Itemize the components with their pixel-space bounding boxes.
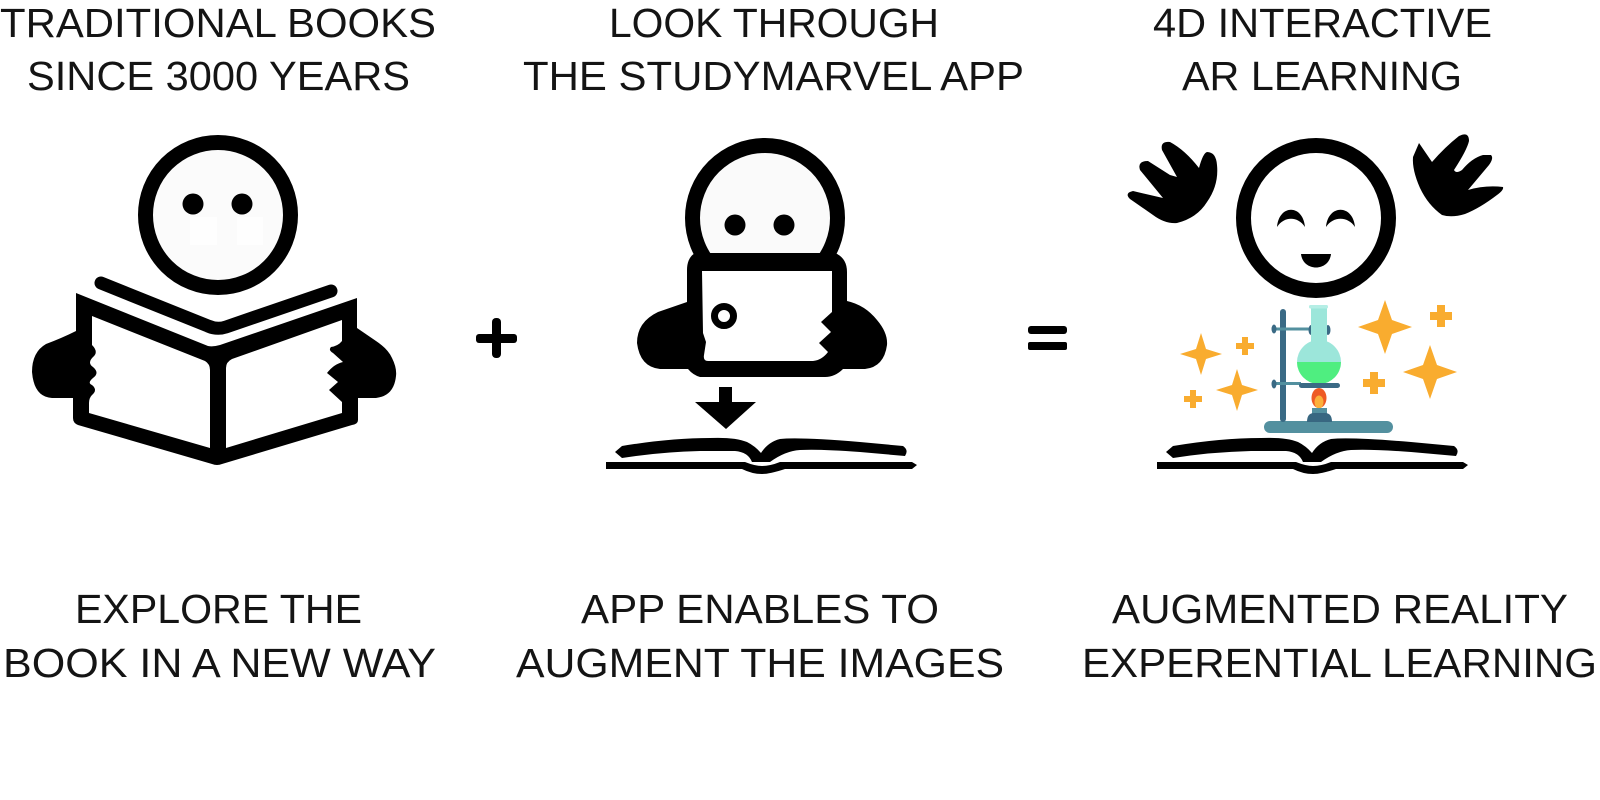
- icon: open book under flask: [1157, 438, 1468, 474]
- icon: sparkles: [1180, 300, 1457, 411]
- caption: explore the book: [3, 586, 436, 686]
- caption: augmented reality: [1082, 586, 1597, 686]
- icon: chemistry flask on burner: [1264, 305, 1393, 433]
- heading: look through the app: [523, 0, 1024, 99]
- icon: person reading a book: [32, 142, 396, 465]
- caption: app enables: [516, 586, 1004, 686]
- heading: traditional books: [0, 0, 436, 99]
- heading: traditional books: SINCE 3000 YEARS: [27, 53, 410, 99]
- caption: explore the book: EXPLORE THE: [75, 586, 362, 632]
- heading: traditional books: TRADITIONAL BOOKS: [0, 0, 436, 46]
- caption: augmented reality: EXPERENTIAL LEARNING: [1082, 640, 1597, 686]
- heading: look through the app: THE STUDYMARVEL APP: [523, 53, 1024, 99]
- icon: happy person with raised hands: [1128, 134, 1503, 290]
- caption: explore the book: BOOK IN A NEW WAY: [3, 640, 436, 686]
- caption: app enables: APP ENABLES TO: [581, 586, 939, 632]
- icon: open book: [606, 438, 917, 474]
- heading: 4D interactive AR learning: [1153, 0, 1492, 99]
- icon: equals sign: [1028, 326, 1067, 350]
- icon: plus sign: [476, 318, 517, 358]
- heading: look through the app: LOOK THROUGH: [609, 0, 939, 46]
- caption: augmented reality: AUGMENTED REALITY: [1112, 586, 1568, 632]
- heading: 4D interactive AR learning: 4D INTERACTIVE: [1153, 0, 1492, 46]
- caption: app enables: AUGMENT THE IMAGES: [516, 640, 1004, 686]
- heading: 4D interactive AR learning: AR LEARNING: [1182, 53, 1462, 99]
- arrow: down to book: [695, 387, 756, 429]
- icon: person holding tablet: [637, 146, 887, 377]
